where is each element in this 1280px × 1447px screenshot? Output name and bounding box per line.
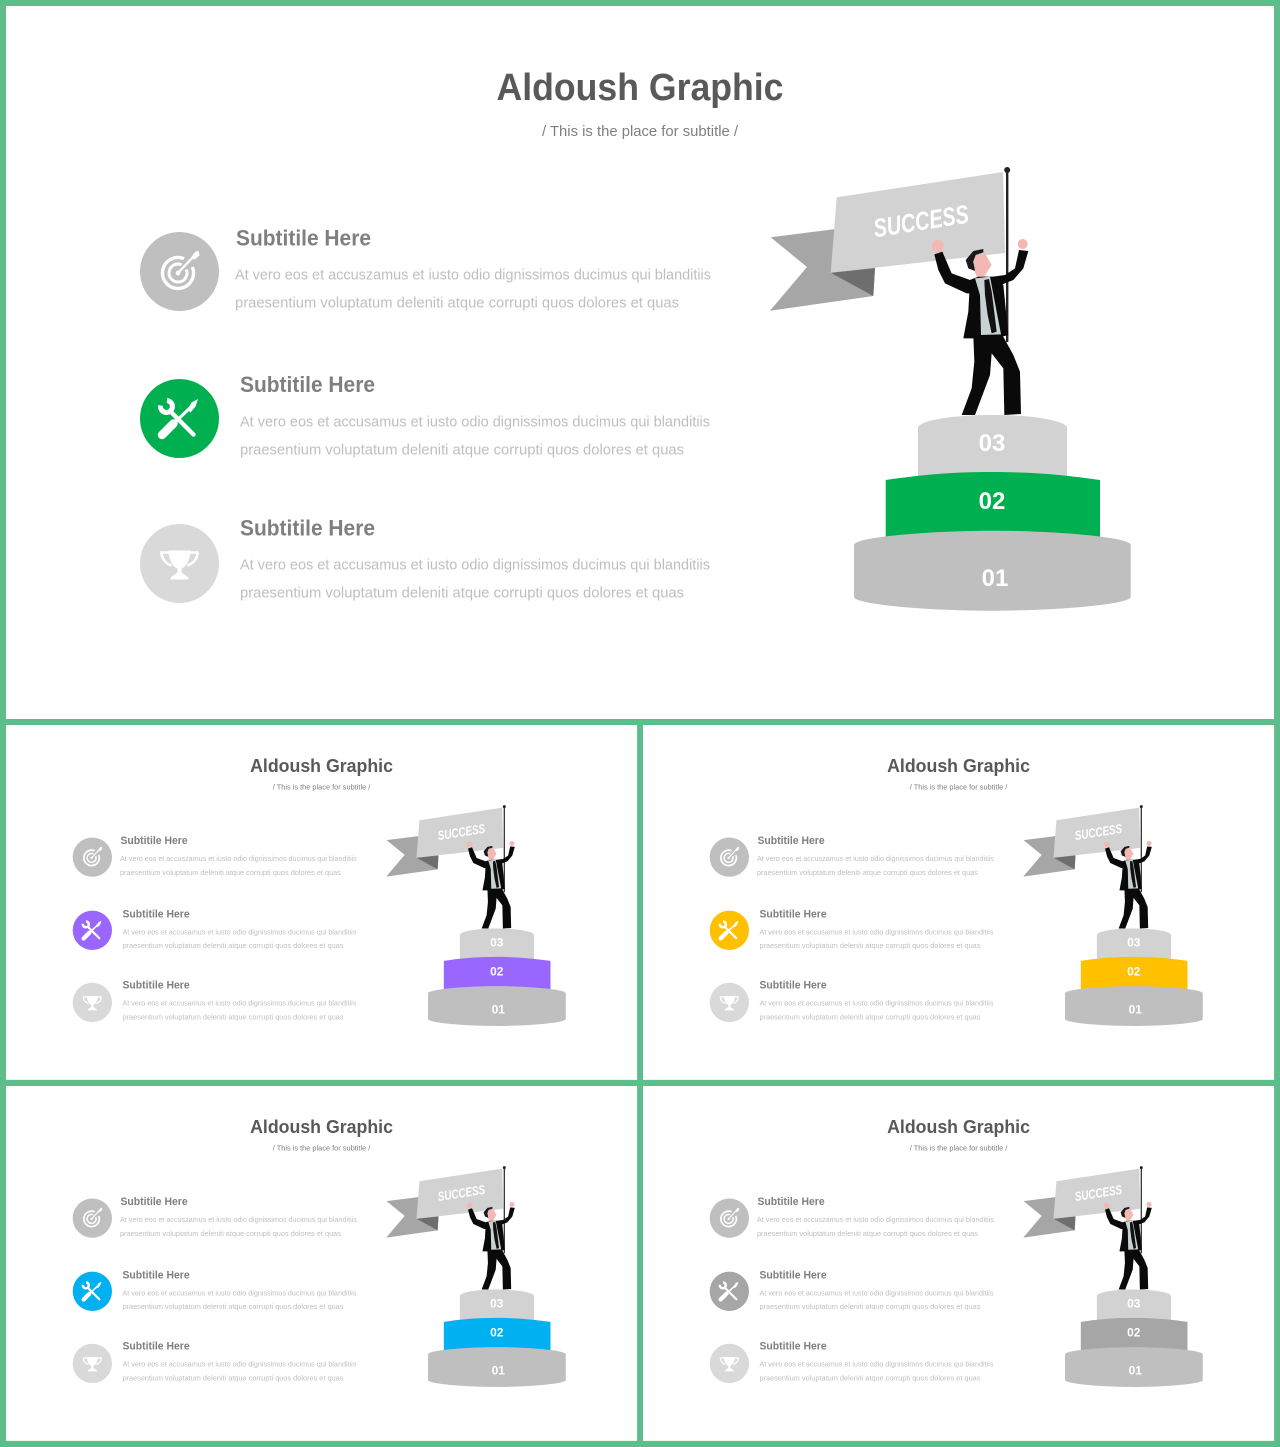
item 1 body: At vero eos et accuszamus et iusto odio dignissimos ducimus qui blanditiis (757, 1215, 994, 1224)
item 1 (140, 226, 711, 312)
item 3 body (122, 998, 357, 1021)
flag banner (770, 167, 1010, 342)
item 2 heading: Subtitile Here (240, 372, 375, 397)
item 2 heading: Subtitile Here (122, 909, 190, 921)
item 1 body: At vero eos et accuszamus et iusto odio dignissimos ducimus qui blanditiis (235, 266, 711, 284)
icon: trophy (73, 983, 112, 1022)
item 3 body: praesentium voluptatum deleniti atque corrupti quos dolores et quas (122, 1373, 344, 1382)
flag banner: SUCCESS (437, 821, 486, 843)
item 2 (73, 1270, 357, 1311)
title: Aldoush Graphic (496, 67, 784, 109)
item 2 body: praesentium voluptatum deleniti atque corrupti quos dolores et quas (122, 941, 344, 950)
slide background (643, 725, 1274, 1080)
tier 02 (886, 472, 1100, 537)
item 2 body: At vero eos et accusamus et iusto odio dignissimos ducimus qui blanditiis (759, 1288, 994, 1297)
item 2 (73, 909, 357, 950)
businessman figure (467, 1202, 515, 1290)
flag banner: SUCCESS (1074, 1182, 1123, 1204)
item 2 heading: Subtitile Here (122, 1270, 190, 1282)
item 3 body (240, 556, 710, 602)
title: Aldoush Graphic (250, 1117, 393, 1138)
subtitle: / This is the place for subtitle / (910, 783, 1008, 792)
item 2 body: At vero eos et accusamus et iusto odio dignissimos ducimus qui blanditiis (240, 414, 710, 430)
item 3 body: praesentium voluptatum deleniti atque corrupti quos dolores et quas (759, 1373, 981, 1382)
pedestal (854, 415, 1131, 611)
item 3 heading: Subtitile Here (240, 516, 375, 540)
item 3 (73, 1341, 357, 1383)
item 3 body (122, 1359, 357, 1382)
icon: target (140, 232, 219, 311)
tier 01: 01 (492, 1003, 505, 1017)
flag banner (1023, 1166, 1143, 1253)
item 3 body (759, 998, 994, 1021)
slide background (6, 725, 637, 1080)
icon: target (73, 1198, 112, 1238)
icon: tools (710, 911, 749, 950)
businessman figure (932, 239, 1028, 415)
item 3 (140, 516, 710, 603)
item 3 body: At vero eos et accusamus et iusto odio dignissimos ducimus qui blanditiis (240, 556, 710, 574)
tier 03 (918, 415, 1067, 478)
subtitle: / This is the place for subtitle / (273, 1144, 371, 1153)
item 1 body: praesentium voluptatum deleniti atque corrupti quos dolores et quas (757, 868, 978, 877)
item 1 heading: Subtitile Here (757, 1196, 825, 1208)
icon: tools (140, 379, 219, 458)
item 1 body: At vero eos et accuszamus et iusto odio dignissimos ducimus qui blanditiis (120, 1215, 357, 1224)
item 2 body: At vero eos et accusamus et iusto odio dignissimos ducimus qui blanditiis (759, 927, 994, 936)
panel: blue variant (6, 1086, 637, 1441)
item 3 (710, 980, 994, 1022)
pedestal (428, 1290, 566, 1387)
tier 02: 02 (490, 964, 504, 978)
tier 03: 03 (979, 430, 1005, 457)
flag banner (1023, 805, 1143, 892)
item 1 body (757, 1215, 994, 1238)
flag banner: SUCCESS (871, 199, 971, 243)
icon: trophy (710, 983, 749, 1022)
item 3 heading: Subtitile Here (122, 1341, 190, 1353)
flag banner: SUCCESS (1074, 821, 1123, 843)
item 2 body (122, 1288, 357, 1311)
flag banner (386, 805, 506, 892)
flag banner (386, 1166, 506, 1253)
icon: trophy (73, 1344, 112, 1383)
item 1 body: At vero eos et accuszamus et iusto odio dignissimos ducimus qui blanditiis (120, 854, 357, 863)
pedestal (428, 929, 566, 1026)
item 3 heading: Subtitile Here (759, 980, 827, 992)
tier 01: 01 (1129, 1003, 1142, 1017)
item 1 body: praesentium voluptatum deleniti atque corrupti quos dolores et quas (120, 868, 341, 877)
tier 02: 02 (979, 488, 1005, 515)
icon: trophy (140, 524, 219, 603)
slide background (6, 1086, 637, 1441)
item 1 heading: Subtitile Here (236, 226, 371, 250)
subtitle: / This is the place for subtitle / (542, 123, 739, 140)
item 3 body: At vero eos et accusamus et iusto odio dignissimos ducimus qui blanditiis (759, 1359, 994, 1368)
icon: trophy (710, 1344, 749, 1383)
item 3 body: At vero eos et accusamus et iusto odio dignissimos ducimus qui blanditiis (122, 1359, 357, 1368)
title: Aldoush Graphic (887, 1117, 1030, 1138)
icon: tools (73, 1272, 112, 1311)
item 3 (710, 1341, 994, 1383)
icon: target (710, 837, 749, 877)
tier 03: 03 (490, 1296, 504, 1310)
title: Aldoush Graphic (250, 756, 393, 777)
tier 02: 02 (1127, 964, 1141, 978)
item 1 body: praesentium voluptatum deleniti atque corrupti quos dolores et quas (235, 294, 679, 312)
item 1 (710, 1196, 994, 1238)
subtitle: / This is the place for subtitle / (910, 1144, 1008, 1153)
item 3 body: At vero eos et accusamus et iusto odio dignissimos ducimus qui blanditiis (122, 998, 357, 1007)
item 3 (73, 980, 357, 1022)
item 2 body: praesentium voluptatum deleniti atque corrupti quos dolores et quas (122, 1302, 344, 1311)
tier 03: 03 (1127, 935, 1141, 949)
pedestal (1065, 929, 1203, 1026)
tier 01: 01 (982, 565, 1008, 592)
item 2 heading: Subtitile Here (759, 1270, 827, 1282)
tier 01: 01 (492, 1364, 505, 1378)
item 2 body: praesentium voluptatum deleniti atque corrupti quos dolores et quas (759, 941, 981, 950)
icon: target (710, 1198, 749, 1238)
item 3 body (759, 1359, 994, 1382)
tier 02: 02 (490, 1325, 504, 1339)
item 1 body: praesentium voluptatum deleniti atque corrupti quos dolores et quas (120, 1229, 341, 1238)
item 1 body (120, 1215, 357, 1238)
item 3 body: praesentium voluptatum deleniti atque corrupti quos dolores et quas (240, 584, 684, 602)
item 2 heading: Subtitile Here (759, 909, 827, 921)
icon: target (73, 837, 112, 877)
slide background (6, 6, 1274, 719)
item 1 (73, 1196, 357, 1238)
item 2 body (759, 1288, 994, 1311)
item 1 body (757, 854, 994, 877)
item 2 body (759, 927, 994, 950)
slide background (643, 1086, 1274, 1441)
panel: yellow variant (643, 725, 1274, 1080)
item 1 heading: Subtitile Here (120, 1196, 188, 1208)
item 2 body: praesentium voluptatum deleniti atque corrupti quos dolores et quas (759, 1302, 981, 1311)
tier 03: 03 (490, 935, 504, 949)
item 2 (710, 1270, 994, 1311)
businessman figure (1104, 841, 1152, 929)
item 2 body (122, 927, 357, 950)
item 1 heading: Subtitile Here (757, 835, 825, 847)
icon: tools (710, 1272, 749, 1311)
item 3 heading: Subtitile Here (122, 980, 190, 992)
item 1 body (120, 854, 357, 877)
panel: main slide (green accent) (6, 6, 1274, 719)
tier 01 (854, 531, 1131, 611)
item 3 body: praesentium voluptatum deleniti atque corrupti quos dolores et quas (122, 1012, 344, 1021)
item 2 body: praesentium voluptatum deleniti atque corrupti quos dolores et quas (240, 442, 684, 458)
item 3 body: praesentium voluptatum deleniti atque corrupti quos dolores et quas (759, 1012, 981, 1021)
item 1 body: praesentium voluptatum deleniti atque corrupti quos dolores et quas (757, 1229, 978, 1238)
item 1 (73, 835, 357, 877)
tier 03: 03 (1127, 1296, 1141, 1310)
flag banner: SUCCESS (437, 1182, 486, 1204)
item 2 (710, 909, 994, 950)
item 2 body (240, 414, 710, 458)
panel: grey variant (643, 1086, 1274, 1441)
subtitle: / This is the place for subtitle / (273, 783, 371, 792)
item 1 (710, 835, 994, 877)
item 1 heading: Subtitile Here (120, 835, 188, 847)
item 2 (140, 372, 710, 458)
tier 01: 01 (1129, 1364, 1142, 1378)
businessman figure (467, 841, 515, 929)
panel: purple variant (6, 725, 637, 1080)
item 1 body: At vero eos et accuszamus et iusto odio dignissimos ducimus qui blanditiis (757, 854, 994, 863)
item 1 body (235, 266, 711, 312)
pedestal (1065, 1290, 1203, 1387)
businessman figure (1104, 1202, 1152, 1290)
item 2 body: At vero eos et accusamus et iusto odio dignissimos ducimus qui blanditiis (122, 927, 357, 936)
icon: tools (73, 911, 112, 950)
item 2 body: At vero eos et accusamus et iusto odio dignissimos ducimus qui blanditiis (122, 1288, 357, 1297)
title: Aldoush Graphic (887, 756, 1030, 777)
tier 02: 02 (1127, 1325, 1141, 1339)
item 3 body: At vero eos et accusamus et iusto odio dignissimos ducimus qui blanditiis (759, 998, 994, 1007)
item 3 heading: Subtitile Here (759, 1341, 827, 1353)
